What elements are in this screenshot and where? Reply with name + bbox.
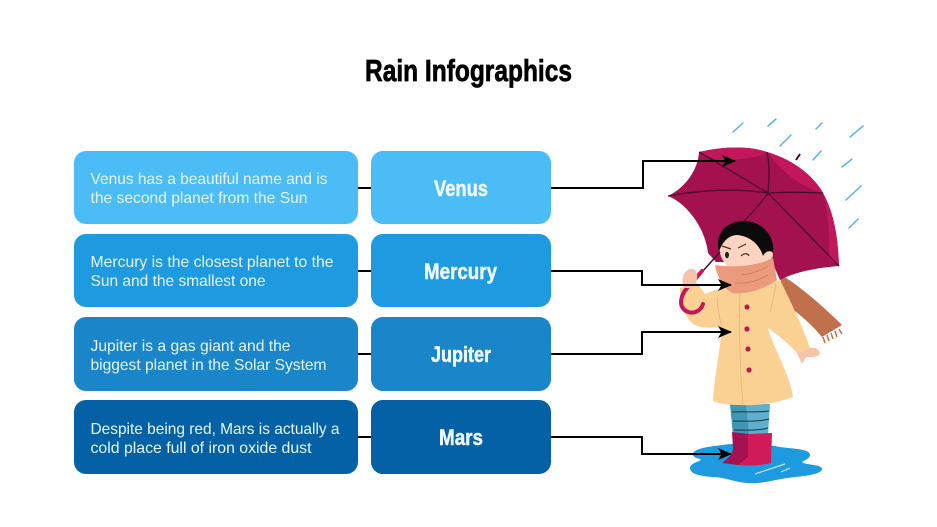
boots: [722, 432, 772, 466]
arrow: Mercury: [551, 271, 731, 285]
row: Mercury: Sun and the smallest one: [90, 273, 266, 290]
girl: [680, 221, 820, 466]
arrow: Mars: [551, 437, 731, 454]
title: Rain Infographics: [365, 53, 572, 88]
umbrella handle: [681, 252, 720, 313]
coat buttons: [744, 304, 752, 373]
row: Mercury: [74, 234, 551, 307]
puddle: [690, 444, 822, 483]
row: Venus: the second planet from the Sun: [90, 190, 308, 207]
row: Venus: Venus: [434, 176, 488, 201]
left hand: [682, 269, 697, 288]
row: Mercury: Mercury is the closest planet to the: [90, 254, 334, 271]
row: Mars: [74, 400, 551, 474]
scarf tail: [780, 274, 842, 343]
legs: [730, 404, 770, 435]
right hand: [797, 348, 820, 364]
scarf: [715, 258, 777, 293]
row: Venus: Venus has a beautiful name and is: [90, 171, 328, 188]
head: [718, 221, 773, 272]
row: Venus: [74, 151, 551, 224]
umbrella: [668, 148, 839, 280]
coat: [680, 280, 810, 405]
arrow: Jupiter: [551, 332, 731, 354]
row: Mars: cold place full of iron oxide dust: [90, 440, 312, 457]
row: Mars: Despite being red, Mars is actually a: [90, 421, 340, 438]
row: Jupiter: Jupiter: [431, 342, 491, 367]
rain drops: [733, 119, 863, 228]
arrow: Venus: [551, 161, 735, 188]
row: Jupiter: Jupiter is a gas giant and the: [90, 338, 290, 355]
row: Mars: Mars: [439, 425, 483, 450]
row: Mercury: Mercury: [424, 259, 498, 284]
row: Jupiter: biggest planet in the Solar System: [90, 357, 326, 374]
row: Jupiter: [74, 317, 551, 391]
